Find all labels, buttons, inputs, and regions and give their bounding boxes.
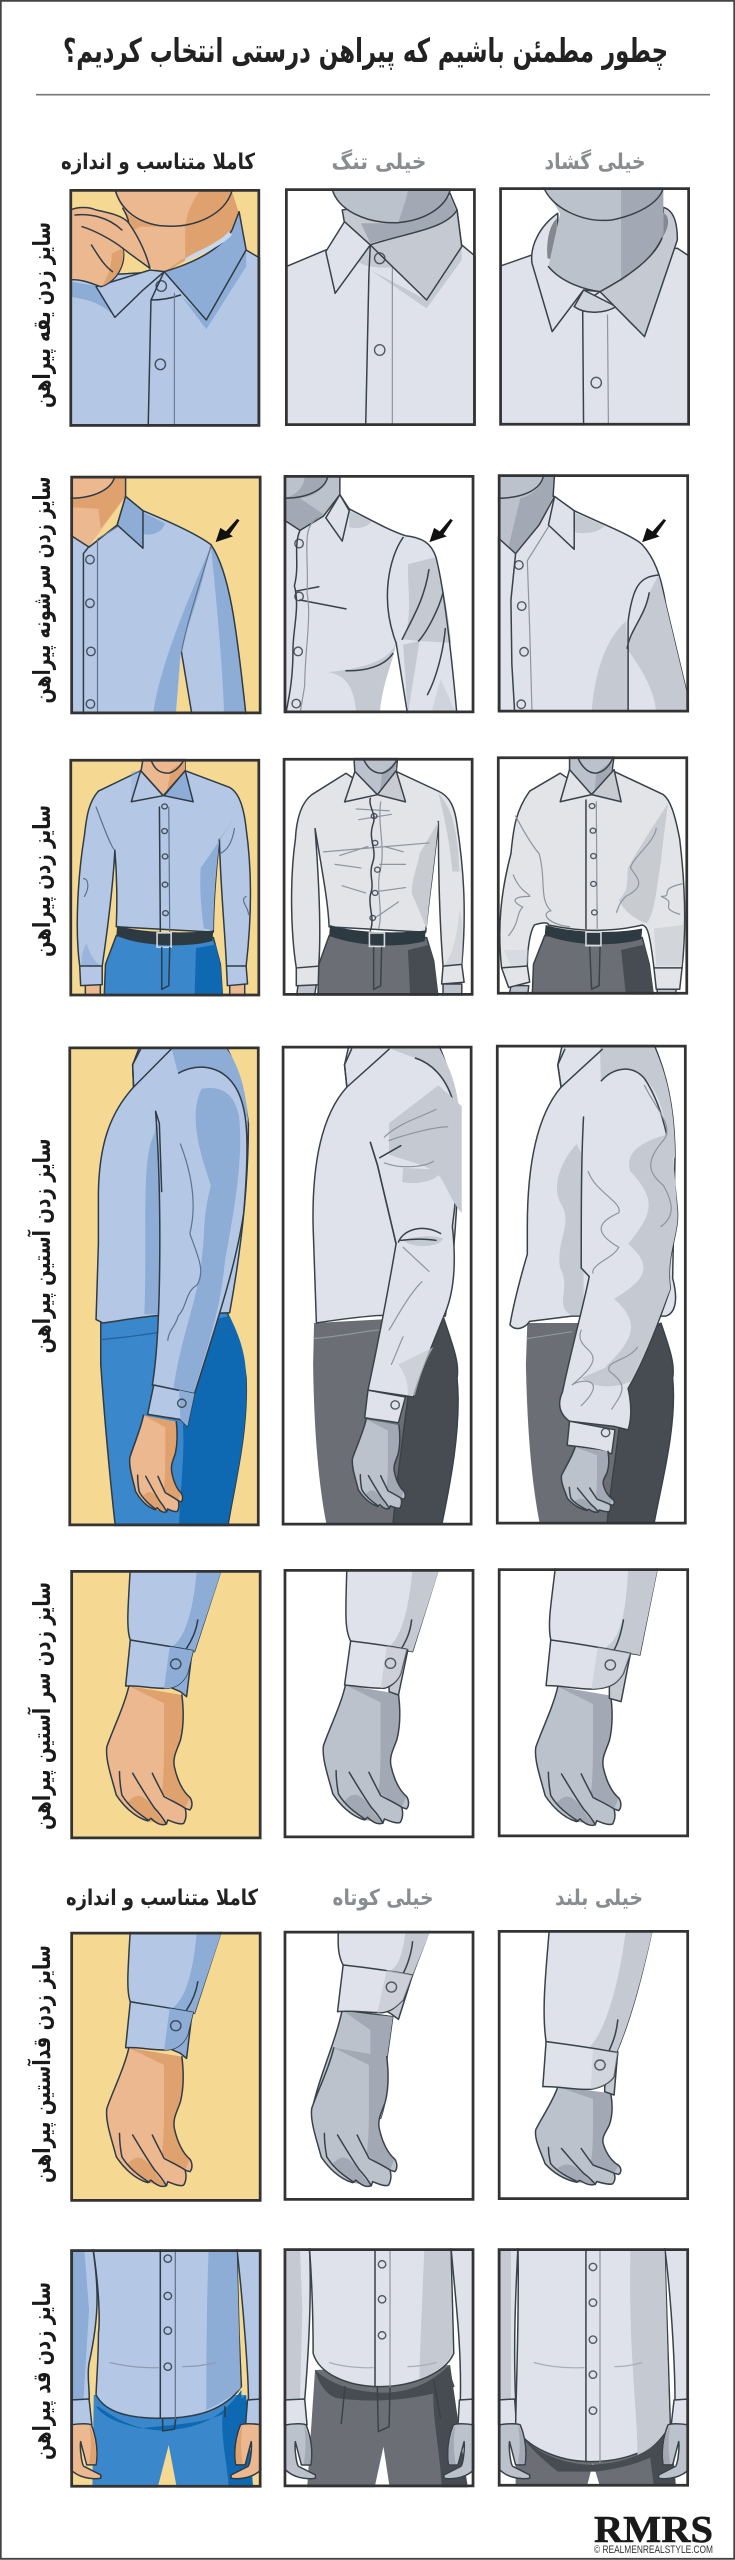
- side label: cuff: سایز زدن سر آستین پیراهن: [27, 1582, 56, 1830]
- panel: body too loose: [496, 756, 688, 995]
- panel: shoulder too tight: [284, 475, 474, 714]
- neck: [141, 759, 185, 796]
- neck: [498, 474, 555, 554]
- shirt torso: [309, 2247, 454, 2387]
- baggy shirt: [500, 770, 685, 989]
- panel: body perfect fit: [69, 758, 260, 996]
- sleeve with wrinkles: [365, 1058, 462, 1423]
- tight shirt: [292, 771, 464, 986]
- neck squeezed by collar: [332, 188, 462, 247]
- hands: [70, 2424, 262, 2479]
- sleeve and cuff: [338, 1928, 430, 2019]
- shirt body: [501, 248, 690, 430]
- neck: [354, 758, 398, 795]
- baggy sleeve: [560, 1069, 678, 1454]
- side label: collar: سایز زدن یقه پیراهن: [28, 222, 56, 408]
- neck: [544, 187, 663, 292]
- shirt: [77, 771, 251, 986]
- hands at cuffs: [85, 984, 245, 998]
- panel: shirt length too short: [284, 2248, 474, 2488]
- panel: cuff too loose: [498, 1568, 690, 1838]
- shirt body and collar: [286, 210, 476, 430]
- column heading: too tight: خیلی تنگ: [332, 148, 426, 175]
- shirt torso: [96, 1044, 248, 1323]
- panel: collar too tight: [285, 188, 476, 426]
- hand: [535, 1687, 621, 1825]
- column heading: too long: خیلی بلند: [555, 1886, 643, 1911]
- hand: [130, 1415, 183, 1512]
- trousers and belt: [318, 925, 438, 1000]
- hand: [561, 1447, 614, 1512]
- hands: [285, 2424, 474, 2479]
- long shirt torso: [516, 2247, 670, 2462]
- jeans: [101, 1313, 246, 1530]
- neck and chin: [115, 189, 239, 273]
- panel: sleeve perfect fit: [68, 1046, 260, 1526]
- shirt torso: [93, 2247, 241, 2418]
- trousers: [526, 1323, 673, 1524]
- side label: sleeve: سایز زدن آستین پیراهن: [27, 1138, 56, 1354]
- panel: shirt length perfect fit: [70, 2249, 262, 2488]
- column heading: perfect fit (second): کاملا متناسب و اندازه: [66, 1886, 258, 1911]
- jeans and belt: [104, 926, 223, 1000]
- arrow: [216, 519, 240, 542]
- sleeve and cuff: [126, 1568, 222, 1697]
- column heading: too short: خیلی کوتاه: [332, 1886, 434, 1911]
- sleeves and cuffs: [284, 2247, 478, 2425]
- tight shirt: [284, 495, 457, 716]
- sleeve and cuff: [546, 1567, 658, 1702]
- panel: collar perfect fit: [69, 189, 260, 427]
- hands: [296, 984, 462, 998]
- neck: [570, 756, 614, 795]
- panel: cuff too tight: [284, 1569, 474, 1838]
- sleeve and cuff: [148, 1067, 247, 1426]
- collar: [96, 212, 246, 320]
- shirt body: [70, 250, 260, 430]
- side label: shoulder: سایز زدن سرشونه پیراهن: [28, 476, 56, 704]
- sleeves and cuffs: [70, 2247, 262, 2425]
- side label: sleeve length: سایز زدن قدآستین پیراهن: [27, 1945, 56, 2183]
- logo: RMRS: RMRS: [594, 2509, 713, 2551]
- panel: shoulder too loose: [498, 474, 690, 712]
- hand: [107, 2048, 192, 2186]
- side label: shirt length: سایز زدن قد پیراهن: [28, 2282, 56, 2460]
- panel: cuff perfect fit: [70, 1570, 262, 1840]
- neck: [70, 476, 126, 546]
- hands: [509, 986, 676, 998]
- hand pinching collar: [70, 208, 150, 287]
- hand: [107, 1686, 192, 1825]
- column heading: perfect fit: کاملا متناسب و اندازه: [61, 150, 255, 175]
- panel: collar too loose: [499, 187, 690, 426]
- sleeve and cuff: [126, 1930, 222, 2058]
- loose collar: [532, 207, 677, 337]
- hand: [352, 1419, 405, 1509]
- column heading: too loose: خیلی گشاد: [544, 148, 646, 175]
- baggy shirt: [498, 496, 689, 716]
- trousers: [307, 2365, 468, 2490]
- panel: sleeve length perfect fit: [70, 1932, 262, 2202]
- jeans: [92, 2390, 253, 2490]
- shirt torso: [313, 1044, 459, 1323]
- panel: shoulder perfect fit: [70, 476, 262, 714]
- shirt with sleeve: [70, 496, 246, 716]
- sleeves and cuffs: [498, 2247, 691, 2425]
- side label: body: سایز زدن پیراهن: [28, 805, 56, 957]
- hand: [323, 1685, 409, 1824]
- panel: sleeve length too long: [498, 1930, 690, 2200]
- neck: [284, 475, 340, 530]
- hands: [499, 2424, 689, 2479]
- arrow: [429, 519, 453, 542]
- long sleeve and cuff: [543, 1928, 652, 2095]
- trousers: [313, 1316, 458, 1526]
- sleeve and cuff: [345, 1567, 439, 1695]
- arrow: [642, 519, 666, 542]
- panel: sleeve too short: [282, 1046, 472, 1526]
- panel: sleeve too long: [496, 1044, 687, 1524]
- hand: [535, 2087, 621, 2185]
- exposed forearm and hand: [311, 2010, 397, 2186]
- panel: shirt length too long: [498, 2248, 690, 2487]
- panel: sleeve length too short: [284, 1930, 474, 2201]
- trousers: [516, 2423, 676, 2487]
- trousers and belt: [532, 925, 654, 1000]
- panel: body too tight: [282, 758, 474, 996]
- baggy torso: [510, 1044, 676, 1329]
